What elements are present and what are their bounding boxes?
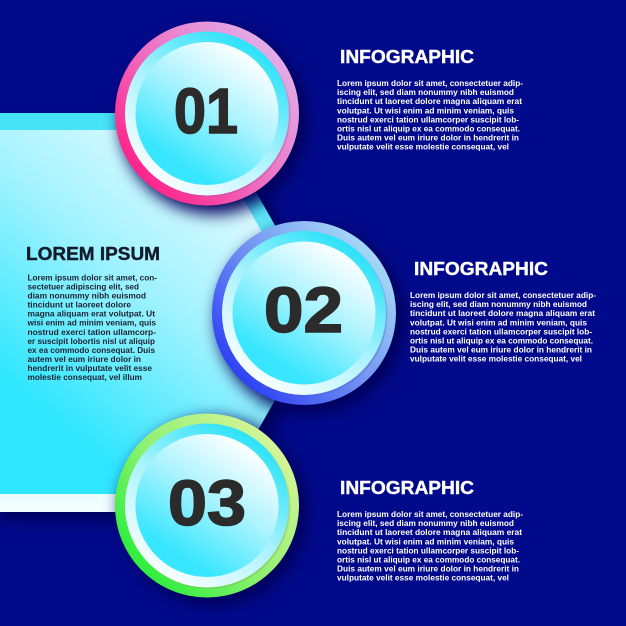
text block 2: nostrud exerci tation ullamcorper suscipit lob- — [410, 326, 592, 336]
text block 2 — [410, 290, 596, 364]
text block 2: Lorem ipsum dolor sit amet, consectetuer adip- — [410, 290, 596, 300]
number 01: 01 — [174, 75, 238, 147]
text block 1: Lorem ipsum dolor sit amet, consectetuer adip- — [337, 78, 523, 88]
left text block: Lorem ipsum dolor sit amet, con- — [28, 272, 157, 282]
left text block: er suscipit lobortis nisl ut aliquip — [28, 336, 155, 346]
text block 2: iscing elit, sed diam nonummy nibh euismod — [410, 299, 587, 309]
circle 01 — [115, 22, 308, 214]
text block 1 — [337, 78, 523, 152]
text block 2: Duis autem vel eum iriure dolor in hendrerit in — [410, 345, 592, 355]
text block 1: vulputate velit esse molestie consequat, vel — [337, 142, 509, 152]
text block 2: tincidunt ut laoreet dolore magna aliquam erat — [410, 308, 595, 318]
heading 2: INFOGRAPHIC — [414, 259, 548, 279]
hexagon fill — [0, 130, 308, 494]
left text block: magna aliquam erat volutpat. Ut — [28, 309, 155, 319]
text block 3: vulputate velit esse molestie consequat, vel — [337, 573, 509, 583]
text block 1: iscing elit, sed diam nonummy nibh euismod — [337, 87, 514, 97]
left text block: nostrud exerci tation ullamcorp- — [28, 327, 156, 337]
hexagon border — [0, 113, 325, 512]
left text block: ex ea commodo consequat. Duis — [28, 345, 155, 355]
text block 1: tincidunt ut laoreet dolore magna aliquam erat — [337, 96, 522, 106]
text block 1: ortis nisl ut aliquip ex ea commodo consequat. — [337, 124, 520, 134]
number 02: 02 — [264, 274, 343, 346]
text block 1: nostrud exerci tation ullamcorper suscipit lob- — [337, 114, 519, 124]
text block 2: vulputate velit esse molestie consequat, vel — [410, 354, 582, 364]
text block 2: ortis nisl ut aliquip ex ea commodo consequat. — [410, 336, 593, 346]
circle 03 — [115, 414, 308, 606]
left text block: sectetuer adipiscing elit, sed — [28, 282, 139, 292]
left text block: autem vel eum iriure dolor in — [28, 354, 141, 364]
panel: hexagon — [0, 113, 336, 521]
text block 3 — [337, 509, 523, 583]
text block 3: volutpat. Ut wisi enim ad minim veniam, quis — [337, 536, 514, 546]
left heading: LOREM IPSUM — [26, 244, 160, 264]
text block 3: Lorem ipsum dolor sit amet, consectetuer adip- — [337, 509, 523, 519]
text block 1: volutpat. Ut wisi enim ad minim veniam, quis — [337, 105, 514, 115]
text block 1: Duis autem vel eum iriure dolor in hendrerit in — [337, 133, 519, 143]
text block 3: tincidunt ut laoreet dolore magna aliquam erat — [337, 527, 522, 537]
left text block: wisi enim ad minim veniam, quis — [27, 318, 156, 328]
left text block: diam nonummy nibh euismod — [28, 291, 146, 301]
left text block — [27, 272, 157, 382]
left text block: tincidunt ut laoreet dolore — [28, 300, 131, 310]
left text block: hendrerit in vulputate velit esse — [28, 363, 152, 373]
text block 2: volutpat. Ut wisi enim ad minim veniam, quis — [410, 317, 587, 327]
text block 3: nostrud exerci tation ullamcorper suscipit lob- — [337, 545, 519, 555]
text block 3: Duis autem vel eum iriure dolor in hendrerit in — [337, 564, 519, 574]
hexagon shadow — [0, 120, 336, 521]
text block 3: iscing elit, sed diam nonummy nibh euismod — [337, 518, 514, 528]
heading 3: INFOGRAPHIC — [340, 478, 474, 498]
text block 3: ortis nisl ut aliquip ex ea commodo consequat. — [337, 554, 520, 564]
heading 1: INFOGRAPHIC — [340, 47, 474, 67]
left text block: molestie consequat, vel illum — [28, 372, 142, 382]
circle 02 — [212, 221, 405, 414]
number 03: 03 — [168, 467, 246, 539]
